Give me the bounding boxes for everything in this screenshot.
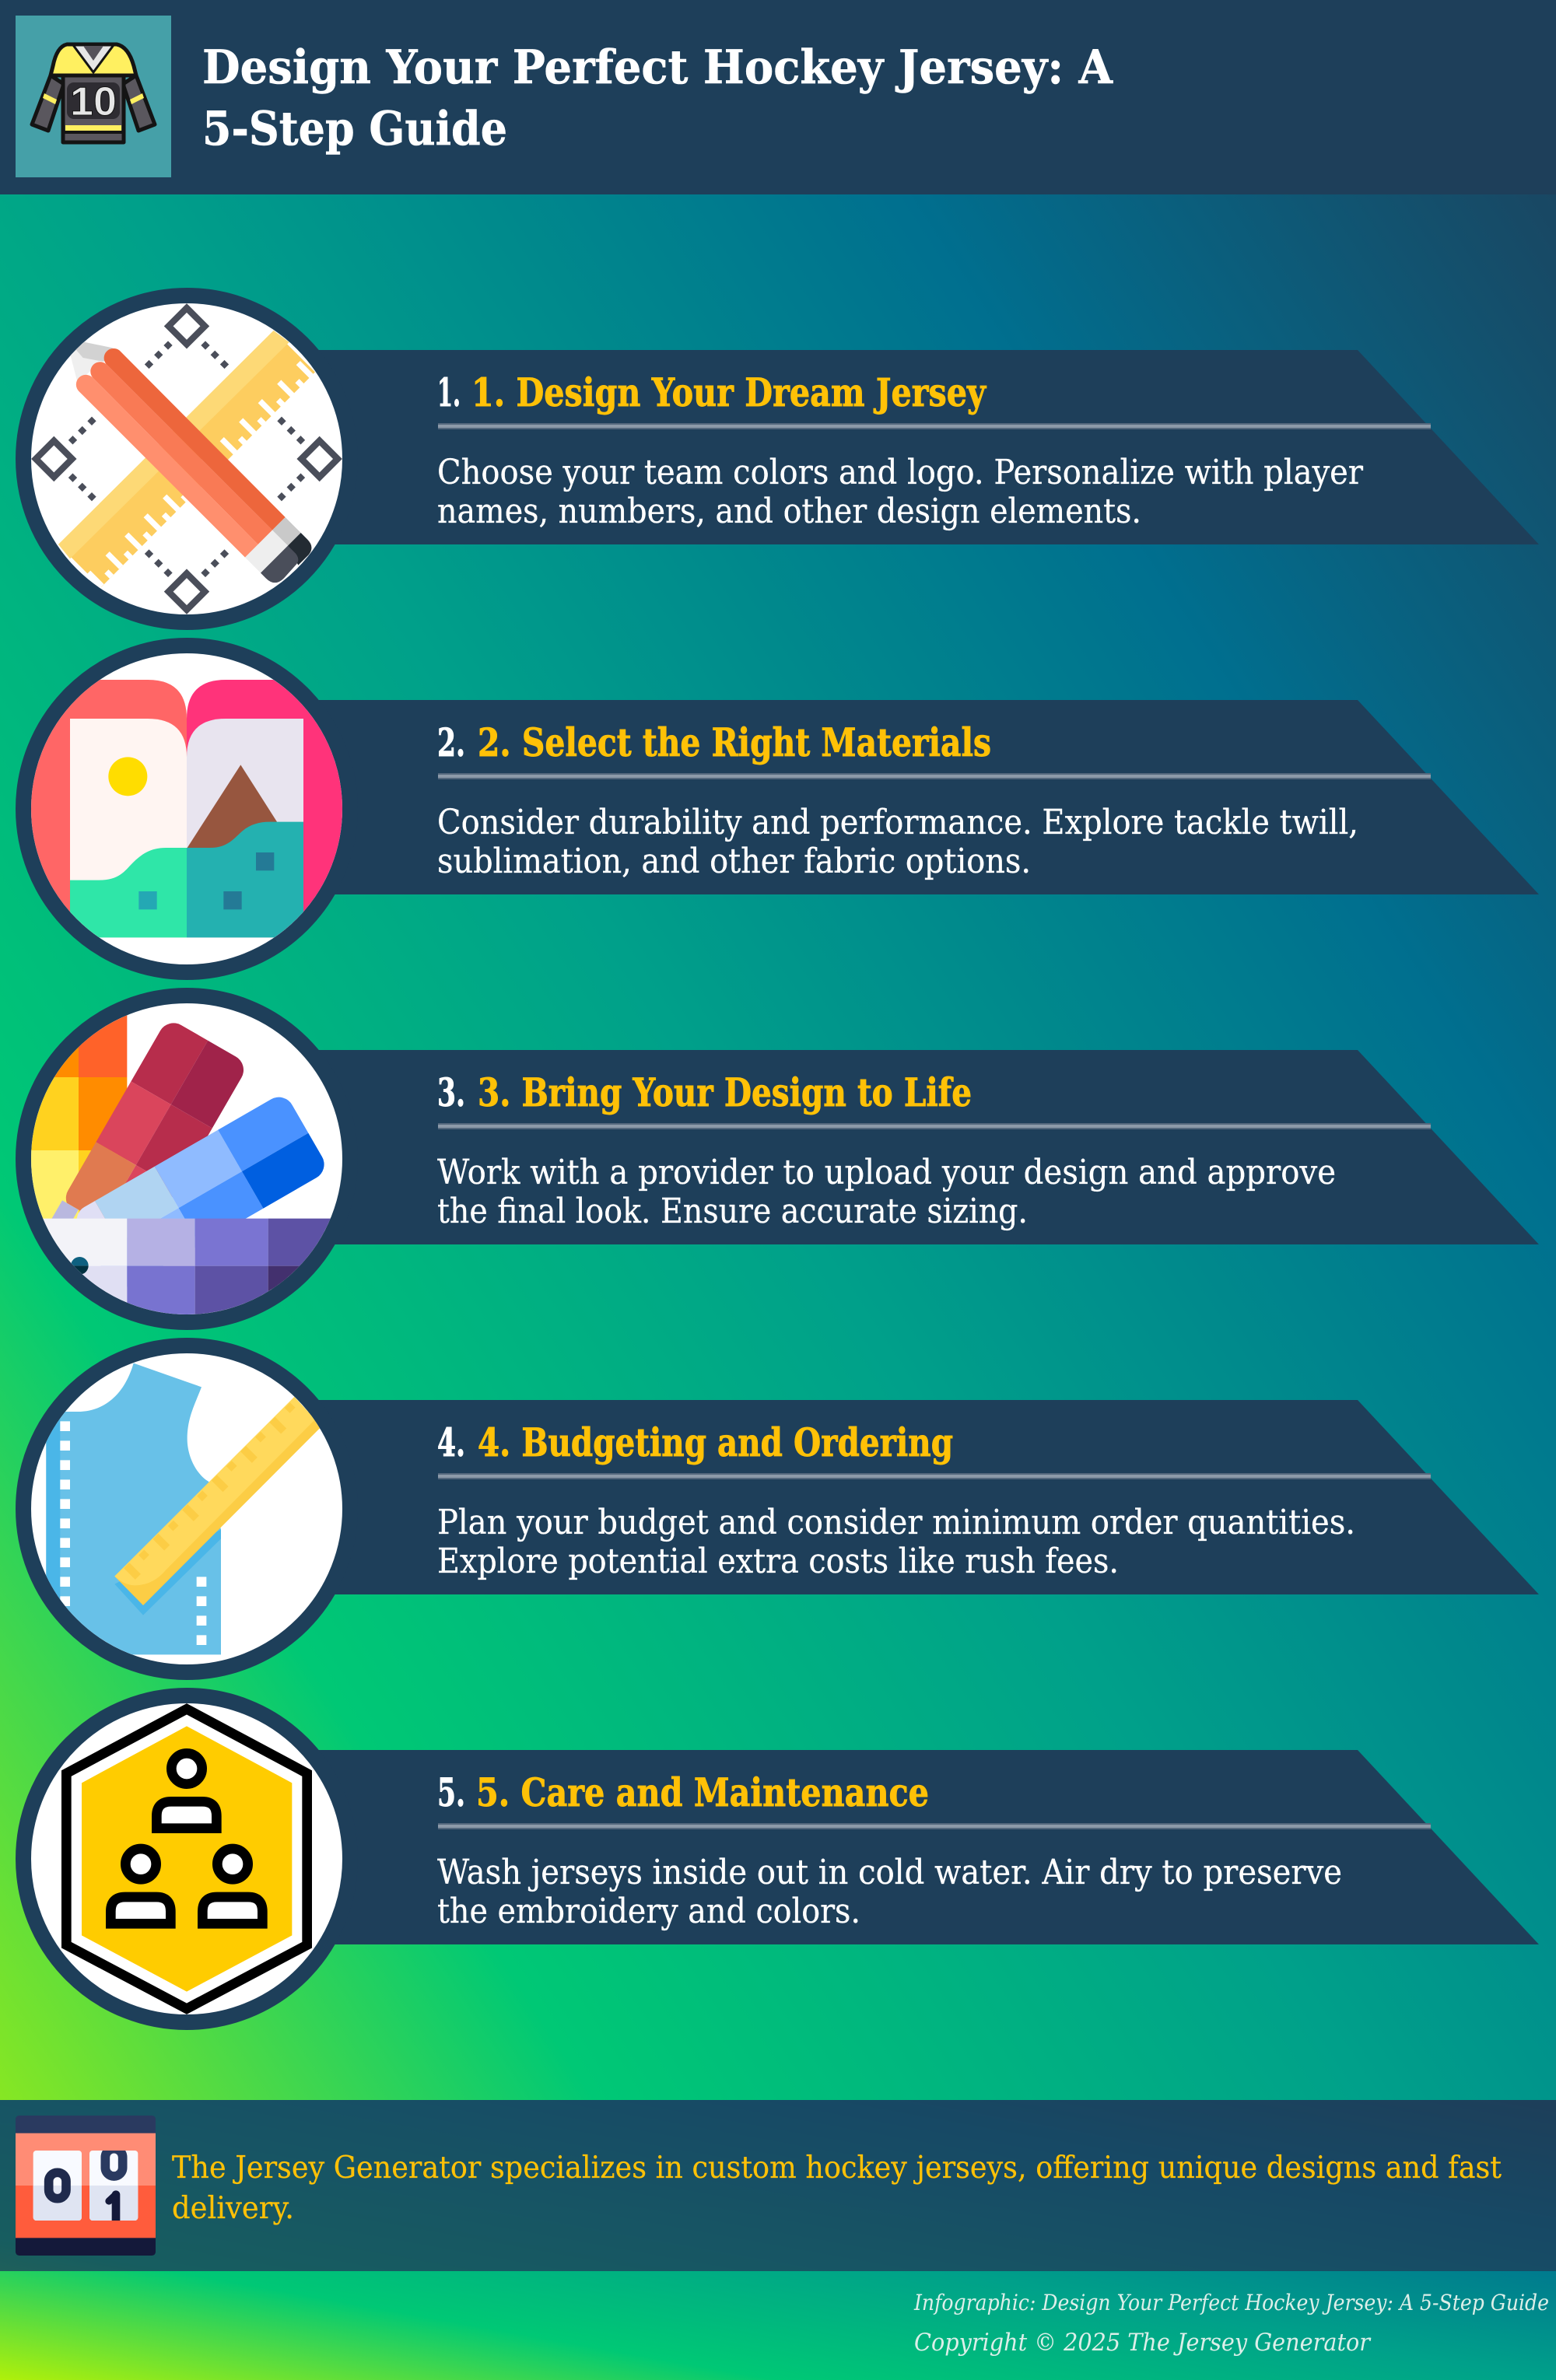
step 3 banner: [233, 1050, 1539, 1244]
step 3 divider and text: the final look. Ensure accurate sizing.: [437, 1192, 1028, 1231]
footer message: [172, 2151, 1502, 2226]
step 5 banner: [233, 1750, 1539, 1944]
footer message: delivery.: [172, 2191, 294, 2226]
step 5 divider and text: the embroidery and colors.: [437, 1892, 860, 1931]
step 4 banner: [233, 1400, 1539, 1594]
title: 5-Step Guide: [202, 102, 507, 156]
footer credits: [913, 2290, 1549, 2357]
step 4 divider and text: 4. Budgeting and Ordering: [478, 1419, 953, 1465]
step 5 divider and text: Wash jerseys inside out in cold water. Air dry to preserve: [437, 1853, 1342, 1892]
footer message: The Jersey Generator specializes in custom hockey jerseys, offering unique designs and fast: [172, 2151, 1502, 2186]
step 5 panel: [23, 1696, 1539, 2022]
step 4 circle: [23, 1346, 350, 1672]
step 1 divider and text: Choose your team colors and logo. Personalize with player: [437, 453, 1364, 492]
step 3 divider and text: Work with a provider to upload your design and approve: [437, 1153, 1336, 1192]
header icon: hockey jersey: 10: [70, 79, 117, 124]
step 5 divider and text: 5.: [437, 1769, 465, 1815]
icon: pencil and ruler: [36, 308, 338, 610]
step 1 circle: [23, 296, 350, 622]
step 3 divider and text: [437, 1069, 1431, 1231]
step 2 banner: [233, 700, 1539, 894]
header bar: [0, 0, 1556, 194]
footer band: [0, 2100, 1556, 2271]
step 2 panel: [23, 646, 1539, 972]
step 1 panel: [23, 296, 1539, 622]
icon: flip counter: [16, 2116, 156, 2256]
step 2 circle: [23, 646, 350, 972]
step 2 divider and text: Consider durability and performance. Explore tackle twill,: [437, 803, 1358, 842]
step 1 divider and text: 1. Design Your Dream Jersey: [471, 369, 987, 415]
step 3 divider and text: 3.: [437, 1069, 465, 1115]
step 3 circle: [23, 996, 350, 1322]
step 2 divider and text: sublimation, and other fabric options.: [437, 842, 1031, 881]
step 5 circle: [23, 1696, 350, 2022]
step 1 divider and text: 1.: [437, 369, 461, 415]
header icon: hockey jersey: [16, 16, 171, 177]
step 2 divider and text: 2. Select the Right Materials: [478, 719, 991, 765]
footer credits: Copyright © 2025 The Jersey Generator: [914, 2329, 1372, 2357]
step 1 divider and text: [437, 369, 1431, 531]
icon: sewing pattern and ruler: [46, 1363, 321, 1654]
step 3 panel: [23, 996, 1539, 1322]
step 4 divider and text: [437, 1419, 1431, 1581]
step 5 divider and text: [437, 1769, 1431, 1931]
step 4 divider and text: 4.: [437, 1419, 465, 1465]
step 3 divider and text: 3. Bring Your Design to Life: [478, 1069, 972, 1115]
title: [202, 40, 1113, 156]
step 1 divider and text: names, numbers, and other design elements.: [437, 492, 1141, 531]
step 4 panel: [23, 1346, 1539, 1672]
title: Design Your Perfect Hockey Jersey: A: [202, 40, 1113, 95]
icon: open book with landscape: [26, 680, 348, 937]
step 5 divider and text: 5. Care and Maintenance: [476, 1769, 929, 1815]
step 2 divider and text: [437, 719, 1431, 881]
step 2 divider and text: 2.: [437, 719, 465, 765]
icon: colour swatch fan: [31, 1015, 330, 1314]
step 4 divider and text: Plan your budget and consider minimum order quantities.: [437, 1503, 1355, 1542]
step 4 divider and text: Explore potential extra costs like rush fees.: [437, 1542, 1119, 1581]
step 1 banner: [233, 350, 1539, 544]
icon: team hexagon: [66, 1709, 307, 2009]
